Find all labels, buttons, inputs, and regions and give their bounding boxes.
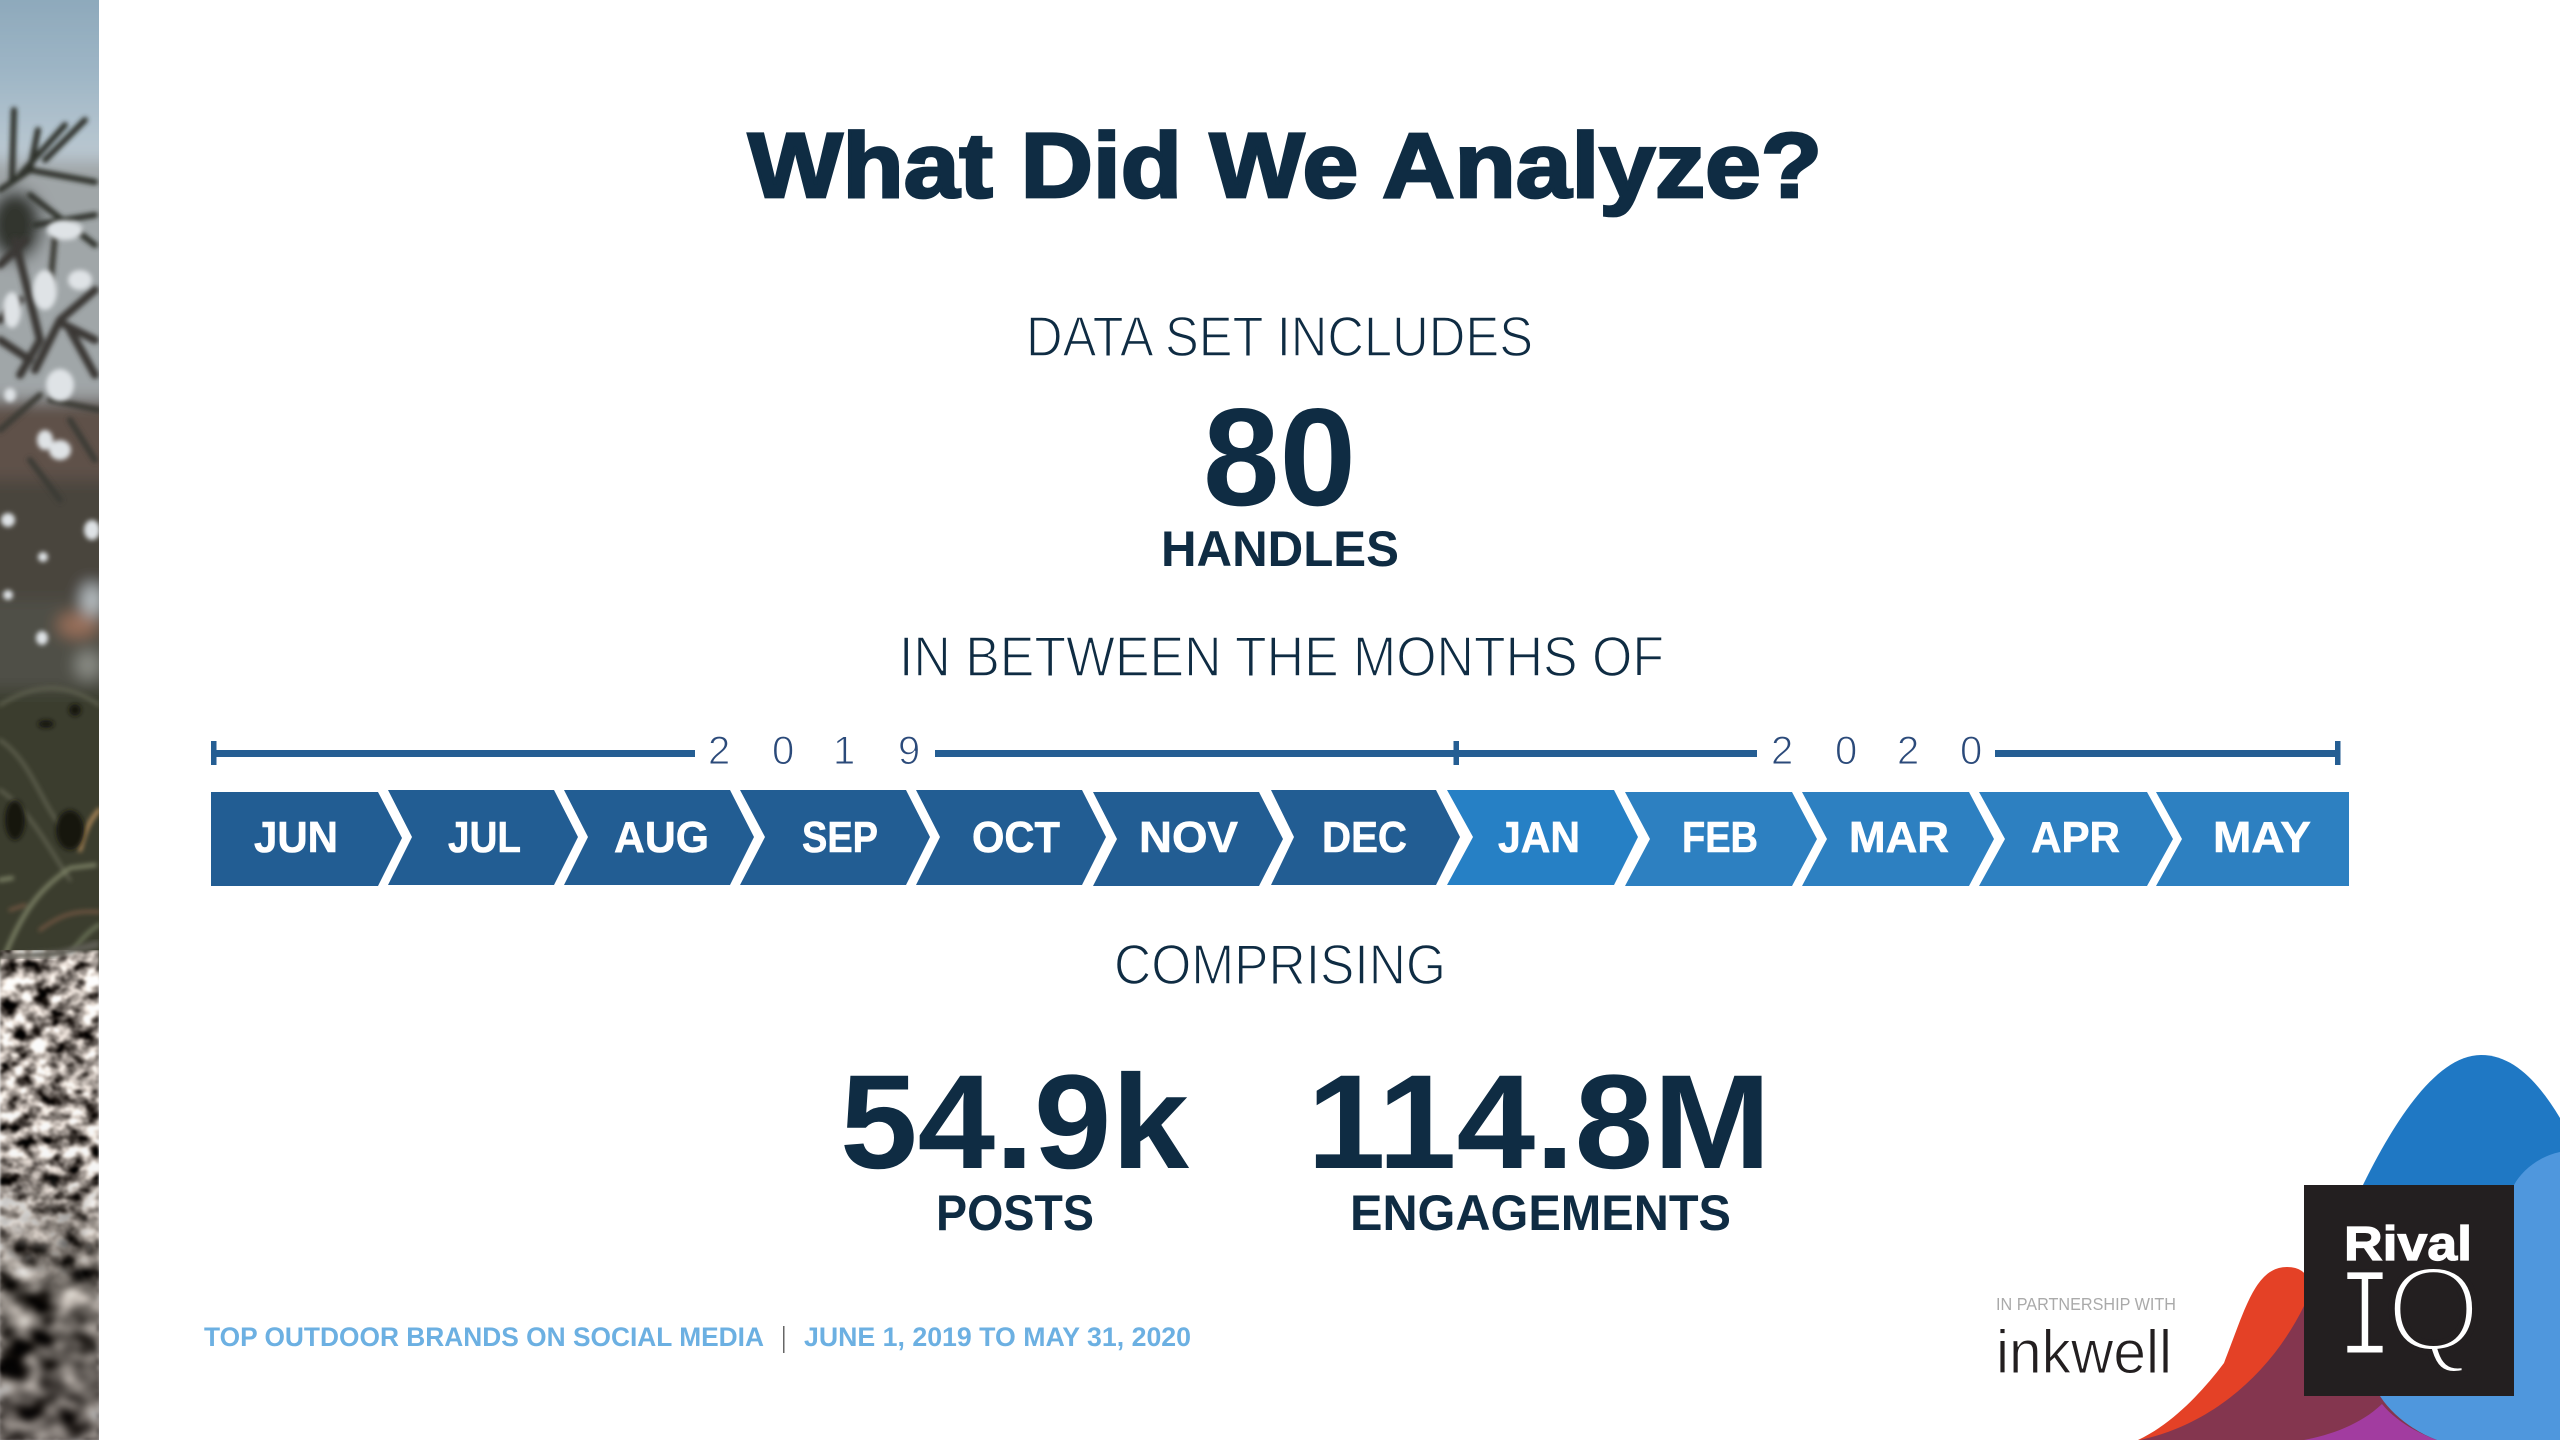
decorative mountain shapes (2138, 1055, 2560, 1440)
chevron: NOV (1093, 792, 1283, 886)
chevron: SEP: SEP (802, 813, 878, 862)
chevron: AUG: AUG (614, 813, 709, 862)
timeline bracket: 2020 (1454, 729, 2340, 773)
stat: posts: POSTS (936, 1185, 1094, 1241)
timeline bracket: 2020: 2020 (1771, 729, 1982, 773)
chevron: JAN (1447, 790, 1638, 885)
partnership logo: inkwell: IN PARTNERSHIP WITH (1996, 1294, 2176, 1314)
chevron: DEC (1271, 790, 1460, 885)
chevron: NOV: NOV (1139, 813, 1239, 862)
timeline bracket: 2019 (211, 729, 1456, 773)
text: comprising: COMPRISING (1114, 933, 1446, 997)
text: data set includes: DATA SET INCLUDES (1026, 305, 1533, 369)
chevron: DEC: DEC (1322, 813, 1407, 862)
chevron: MAR (1802, 792, 1994, 886)
chevron: JUN (211, 792, 402, 886)
stat: 80 handles: HANDLES (1161, 521, 1399, 577)
chevron: FEB: FEB (1682, 813, 1758, 862)
stat: engagements: ENGAGEMENTS (1350, 1185, 1731, 1241)
footer caption: TOP OUTDOOR BRANDS ON SOCIAL MEDIA (204, 1322, 764, 1352)
text: in between the months of: IN BETWEEN THE MONTHS OF (899, 625, 1664, 689)
footer caption (204, 1322, 1191, 1353)
partnership logo: inkwell: inkwell (1996, 1318, 2172, 1386)
logo: Rival IQ: Q (2386, 1241, 2481, 1377)
footer caption: JUNE 1, 2019 TO MAY 31, 2020 (804, 1322, 1191, 1352)
chevron: APR (1979, 792, 2173, 886)
chevron: OCT (916, 790, 1106, 885)
chevron: MAY (2156, 792, 2349, 886)
stat: engagements: 114.8M (1307, 1048, 1771, 1197)
chevron: JAN: JAN (1498, 813, 1580, 862)
logo: Rival IQ: Rival (2344, 1218, 2472, 1271)
chevron: AUG (564, 790, 754, 885)
month chevrons (211, 790, 2349, 886)
stat: 80 handles: 80 (1203, 380, 1356, 535)
logo: Rival IQ: I (2337, 1249, 2393, 1392)
chevron: FEB (1625, 792, 1817, 886)
timeline bracket: 2019: 2019 (708, 729, 920, 773)
stat: 80 handles (1161, 380, 1399, 577)
chevron: SEP (740, 790, 930, 885)
chevron: OCT: OCT (972, 813, 1060, 862)
chevron: MAY: MAY (2213, 813, 2311, 862)
panel: side photo (0, 0, 99, 1440)
chevron: JUL (388, 790, 578, 885)
logo: Rival IQ (2304, 1185, 2514, 1396)
chevron: JUN: JUN (254, 813, 338, 862)
chevron: MAR: MAR (1849, 813, 1949, 862)
chevron: APR: APR (2031, 813, 2120, 862)
title: What Did We Analyze? (748, 115, 1822, 217)
chevron: JUL: JUL (448, 813, 521, 862)
stat: posts: 54.9k (840, 1048, 1189, 1197)
